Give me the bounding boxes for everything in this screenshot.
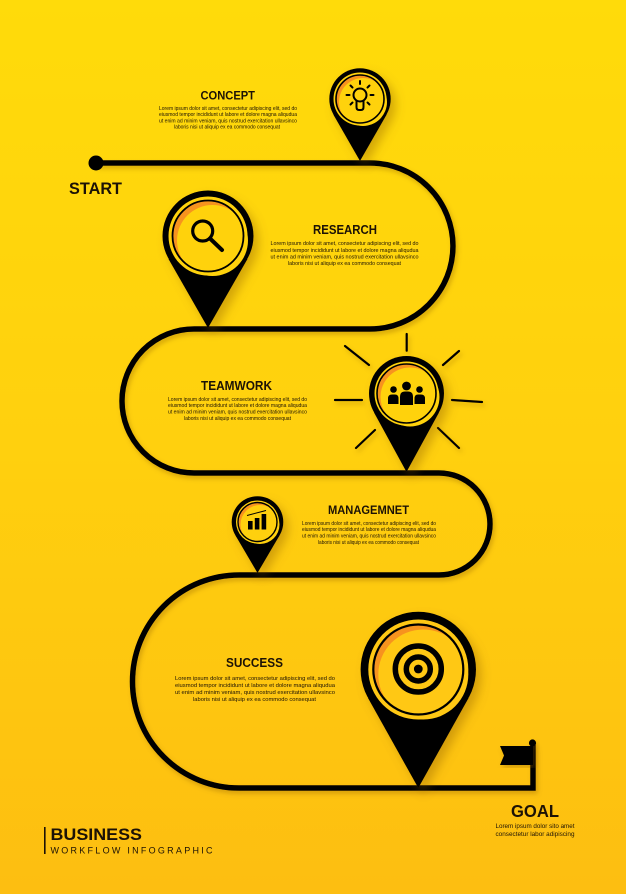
text: concept: laboris nisi ut aliquip ex ea commodo consequat	[174, 124, 280, 130]
text: concept: Lorem ipsum dolor sit amet, consectetur adipiscing elit, sed do	[159, 106, 297, 112]
text: success: ut enim ad minim veniam, quis nostrud exercitation ullavsinco	[175, 690, 335, 696]
text: research: eiusmod tempor incididunt ut labore et dolore magna aliqudua	[270, 248, 419, 254]
footer title block	[44, 825, 213, 856]
text: management: Lorem ipsum dolor sit amet, consectetur adipiscing elit, sed do	[302, 521, 436, 527]
rays around teamwork pin	[335, 334, 482, 448]
text: goal: GOAL	[511, 801, 559, 821]
text: research: RESEARCH	[313, 222, 377, 237]
text: success: SUCCESS	[226, 655, 283, 670]
text: teamwork: TEAMWORK	[201, 379, 272, 393]
text: goal: consectetur labor adipiscing	[496, 832, 574, 838]
text: management: laboris nisi ut aliquip ex ea commodo consequat	[318, 540, 419, 546]
text: success: eiusmod tempor incididunt ut labore et dolore magna aliqudua	[175, 683, 336, 689]
text: research: laboris nisi ut aliquip ex ea commodo consequat	[288, 261, 401, 267]
text: management: ut enim ad minim veniam, quis nostrud exercitation ullavsinco	[302, 533, 436, 539]
footer title block: WORKFLOW INFOGRAPHIC	[50, 846, 213, 856]
icon: target	[395, 646, 441, 692]
text: teamwork: laboris nisi ut aliquip ex ea commodo consequat	[184, 416, 291, 422]
text: goal: Lorem ipsum dolor sito amet	[496, 824, 575, 830]
icon: light bulb	[346, 81, 374, 110]
icon: people	[388, 382, 425, 405]
text: management: MANAGEMNET	[328, 504, 409, 517]
text: teamwork	[168, 379, 308, 422]
pin: management	[232, 496, 283, 573]
icon: magnifier	[193, 221, 222, 250]
start dot	[88, 156, 104, 170]
text: success	[175, 655, 336, 703]
text: research: Lorem ipsum dolor sit amet, consectetur adipiscing elit, sed do	[270, 241, 418, 247]
text: success: Lorem ipsum dolor sit amet, consectetur adipiscing elit, sed do	[175, 676, 335, 682]
start label: START	[69, 180, 122, 198]
text: concept: eiusmod tempor incididunt ut labore et dolore magna aliqudua	[159, 112, 298, 118]
workflow path	[96, 163, 533, 788]
text: concept: CONCEPT	[200, 88, 256, 102]
footer title block: BUSINESS	[50, 825, 142, 844]
text: goal	[496, 801, 575, 838]
text: management: eiusmod tempor incididunt ut labore et dolore magna aliqudua	[302, 527, 437, 533]
text: teamwork: Lorem ipsum dolor sit amet, consectetur adipiscing elit, sed do	[168, 397, 307, 403]
text: research	[270, 222, 419, 267]
text: management	[302, 504, 437, 546]
text: success: laboris nisi ut aliquip ex ea commodo consequat	[193, 697, 316, 703]
text: teamwork: ut enim ad minim veniam, quis nostrud exercitation ullavsinco	[168, 409, 307, 415]
icon: bar chart	[247, 510, 266, 530]
text: concept: ut enim ad minim veniam, quis nostrud exercitation ullavsinco	[159, 118, 297, 124]
pin: teamwork	[369, 356, 444, 472]
pin: research	[162, 190, 254, 328]
icon: goal flag	[500, 739, 536, 765]
text: research: ut enim ad minim veniam, quis nostrud exercitation ullavsinco	[270, 254, 418, 260]
pin: concept	[329, 68, 391, 161]
text: concept	[159, 88, 298, 130]
text: teamwork: eiusmod tempor incididunt ut labore et dolore magna aliqudua	[168, 403, 308, 409]
pin: success	[361, 612, 476, 788]
